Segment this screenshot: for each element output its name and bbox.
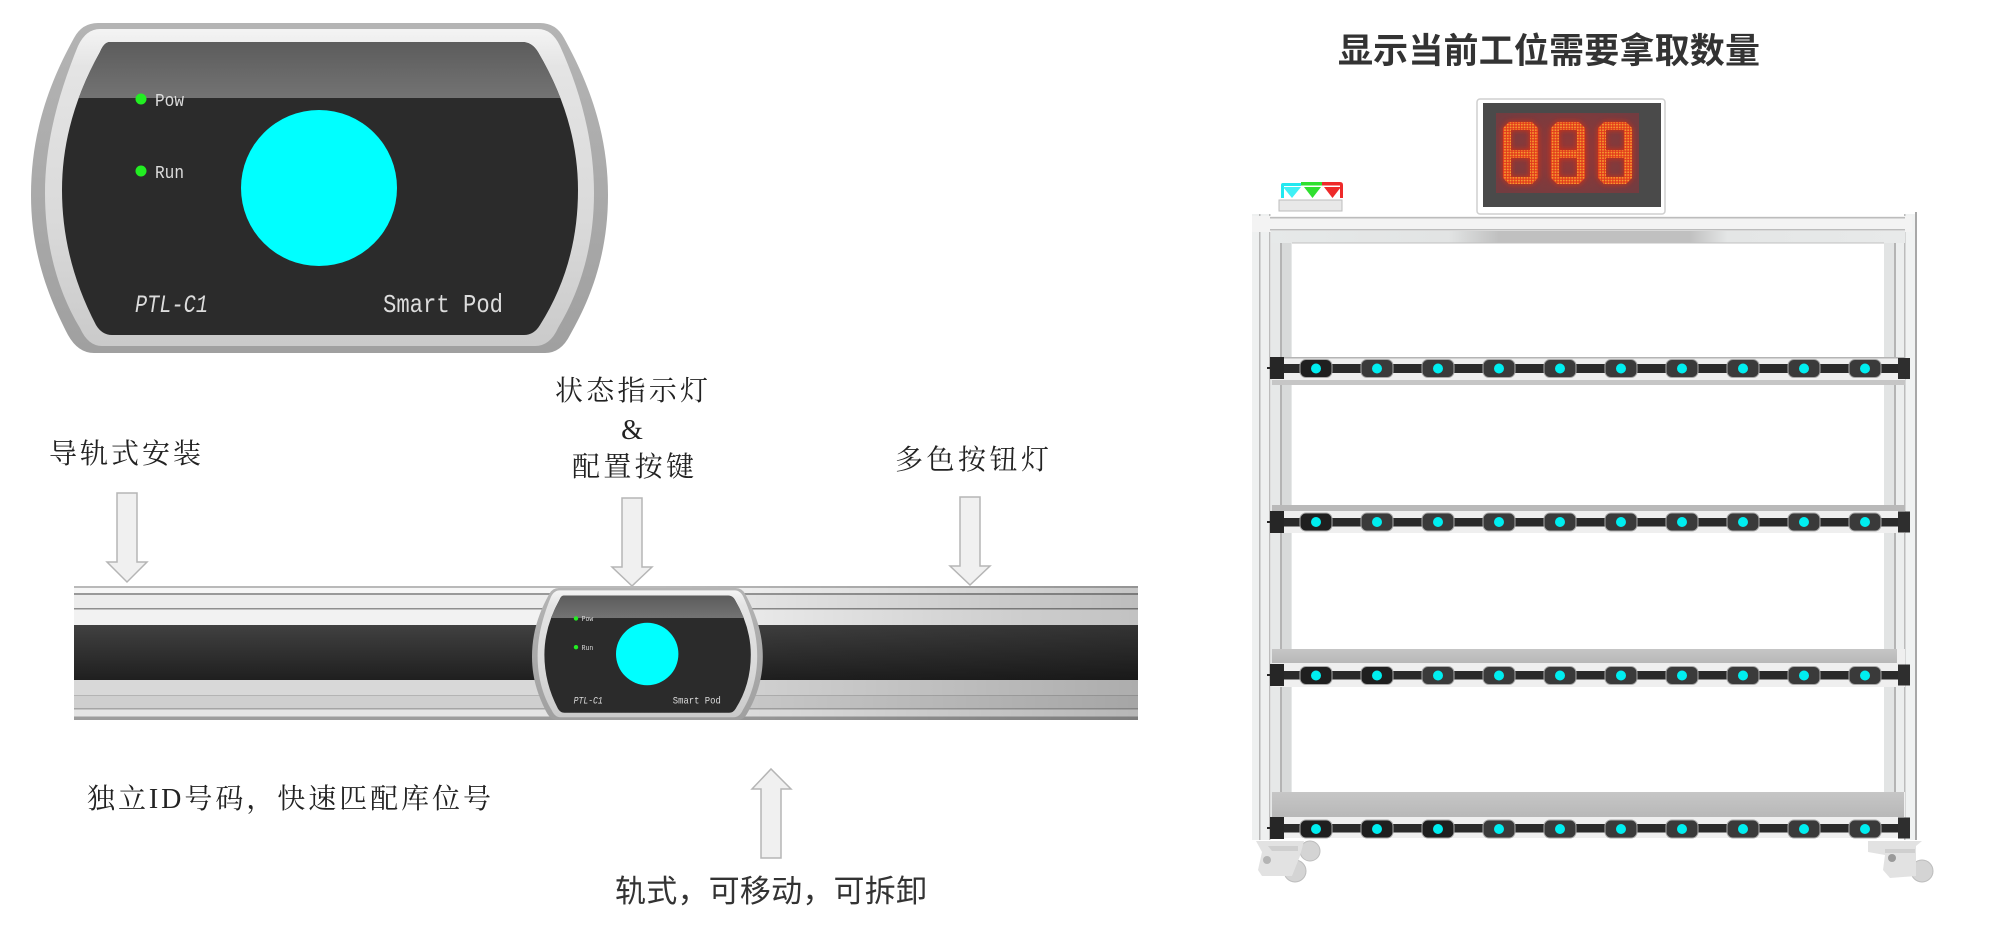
arrow: status lights	[612, 498, 652, 586]
enlarged PTL-C1 smart pod	[31, 23, 608, 353]
shelf row 1	[1267, 357, 1910, 385]
right caster	[1868, 841, 1933, 882]
shelf row 2	[1267, 505, 1910, 533]
shelf row 4	[1267, 792, 1910, 839]
tri-color stack light	[1279, 182, 1343, 211]
small pod on rail	[532, 588, 763, 720]
label: unique ID: 独立ID号码，快速匹配库位号	[87, 783, 491, 815]
LED quantity display	[1477, 99, 1665, 214]
brand label: Smart Pod	[383, 290, 503, 320]
shelving rack frame	[1252, 212, 1917, 840]
small pod on rail: Smart Pod	[673, 696, 721, 708]
pow indicator: Pow	[155, 92, 184, 112]
guide rail	[74, 586, 1138, 720]
label: status lights and config key	[555, 375, 708, 483]
label: rail mounting: 导轨式安装	[49, 438, 201, 470]
run indicator	[136, 164, 184, 184]
arrow: rail mounting	[107, 493, 147, 582]
label: status lights and config key: 状态指示灯	[555, 375, 708, 407]
heading: pick quantity display: 显示当前工位需要拿取数量	[1338, 31, 1760, 71]
model label: PTL-C1	[135, 291, 208, 320]
led digits 888 glow	[1503, 122, 1632, 184]
small pod on rail: Run	[582, 645, 593, 653]
label: status lights and config key: 配置按键	[572, 451, 694, 483]
label: movable and removable: 轨式，可移动，可拆卸	[615, 874, 927, 909]
pow indicator	[136, 92, 184, 112]
label: status lights and config key: &	[621, 415, 643, 446]
pod button light	[241, 110, 397, 266]
small pod on rail: PTL-C1	[574, 697, 603, 708]
arrow: multicolor light	[950, 497, 990, 585]
shelf row 3	[1267, 649, 1910, 687]
small pod on rail: Pow	[582, 616, 594, 624]
arrow: movable	[752, 769, 791, 858]
label: multicolor button light: 多色按钮灯	[895, 444, 1049, 476]
left caster	[1256, 841, 1320, 882]
run indicator: Run	[155, 164, 184, 184]
led digits 888	[1503, 122, 1632, 184]
